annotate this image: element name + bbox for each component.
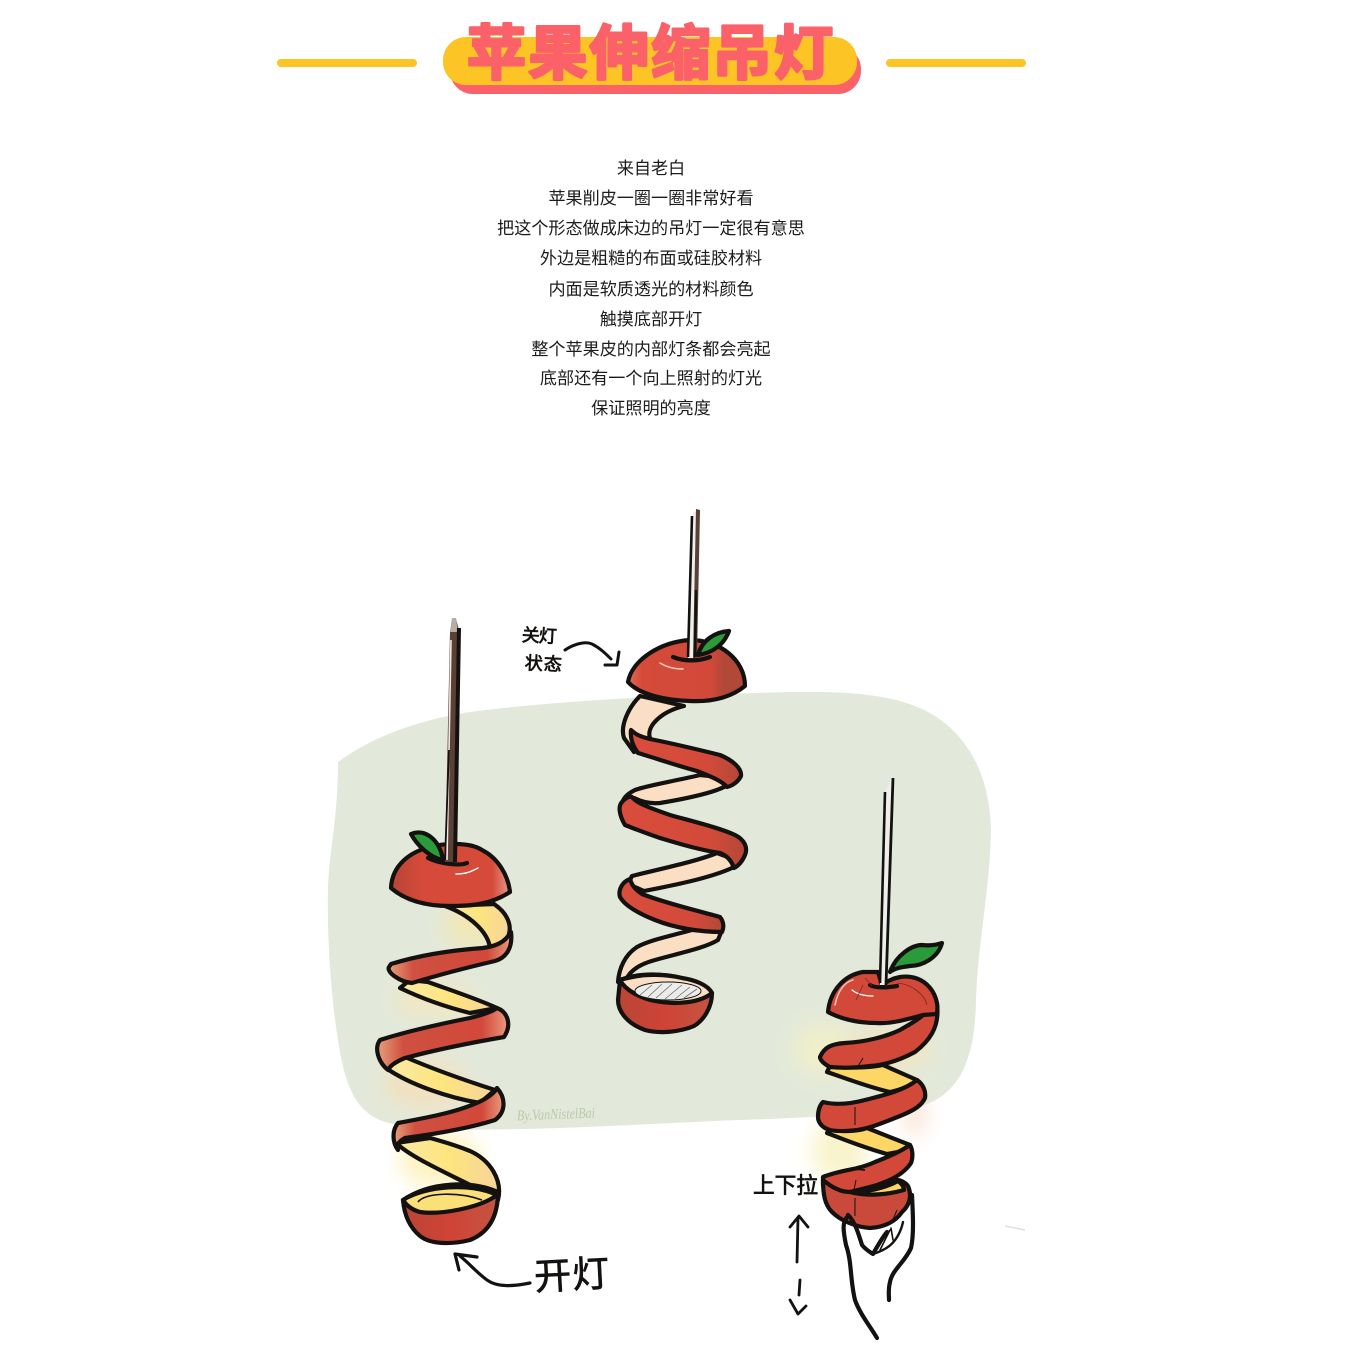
- title banner: [277, 6, 1026, 94]
- watermark: By.VanNistelBai: [517, 1106, 595, 1124]
- down arrow: [790, 1280, 806, 1314]
- title pill: [443, 37, 857, 85]
- up arrow: [790, 1216, 808, 1262]
- middle lamp: light off: [618, 509, 746, 1032]
- dashed seams: [854, 1058, 897, 1222]
- right lamp: stretched: [793, 777, 942, 1338]
- text: 苹果削皮一圈一圈非常好看: [548, 189, 754, 208]
- red strip 1: [631, 730, 741, 787]
- label text: 上下拉: [753, 1168, 818, 1200]
- red strip E: [823, 1145, 912, 1192]
- text: 底部还有一个向上照射的灯光: [540, 369, 762, 388]
- text: 触摸底部开灯: [600, 310, 702, 329]
- title pill shadow: [450, 46, 861, 94]
- title right rule: [886, 59, 1026, 67]
- yellow strip B: [827, 1065, 917, 1092]
- title text: 苹果伸缩吊灯: [467, 6, 835, 91]
- bowl: [403, 1184, 498, 1243]
- red strip C: [818, 1080, 925, 1131]
- peach strip 4: [618, 930, 722, 982]
- stick: [445, 618, 459, 862]
- glow around right spiral: [793, 1024, 930, 1182]
- arrow: [565, 643, 619, 665]
- text: 内面是软质透光的材料颜色: [548, 280, 754, 299]
- leaf: [890, 943, 942, 972]
- stick: [688, 509, 700, 658]
- apple top cap: [391, 844, 510, 906]
- red strip 1: [389, 932, 511, 983]
- green background blob: [328, 692, 991, 1130]
- leaf: [698, 631, 729, 655]
- text: 来自老白: [617, 159, 685, 178]
- bowl with hatched disc: [618, 974, 712, 1032]
- text: 保证照明的亮度: [591, 399, 711, 418]
- peach strip 1: [623, 696, 684, 752]
- yellow strip 4: [396, 1138, 499, 1200]
- yellow strip 2: [400, 980, 497, 1013]
- left lamp: light on: [377, 618, 511, 1243]
- back yellow strip below cap: [445, 904, 510, 948]
- yellow strip 3: [386, 1057, 495, 1103]
- annotation: light off state: 状态: [524, 649, 563, 677]
- label text: 关灯: [521, 621, 557, 649]
- arrow: [455, 1254, 530, 1286]
- peach strip 3: [628, 853, 736, 891]
- red strip A: [820, 1005, 937, 1068]
- stick: [880, 777, 893, 985]
- leaf: [411, 832, 443, 860]
- text: 把这个形态做成床边的吊灯一定很有意思: [497, 219, 805, 238]
- text: 整个苹果皮的内部灯条都会亮起: [531, 340, 771, 359]
- yellow strip D: [827, 1128, 910, 1154]
- text: 外边是粗糙的布面或硅胶材料: [540, 249, 762, 268]
- title left rule: [277, 59, 417, 67]
- annotation: light on: [455, 1243, 611, 1301]
- apple top cap: [628, 640, 745, 701]
- annotation: pull up and down: [753, 1168, 818, 1314]
- red strip 2: [377, 1008, 508, 1070]
- glow around left spiral: [383, 903, 495, 1188]
- apple top cap: [828, 972, 937, 1023]
- hand: [844, 1195, 913, 1338]
- intro text block: [497, 159, 805, 418]
- peach strip 2: [622, 775, 730, 806]
- red strip 3: [619, 879, 723, 932]
- red strip 2: [620, 797, 746, 868]
- label text: 开灯: [533, 1243, 611, 1301]
- bowl: [823, 1169, 910, 1228]
- annotation: light off state: [521, 621, 619, 677]
- red strip 3: [394, 1088, 504, 1150]
